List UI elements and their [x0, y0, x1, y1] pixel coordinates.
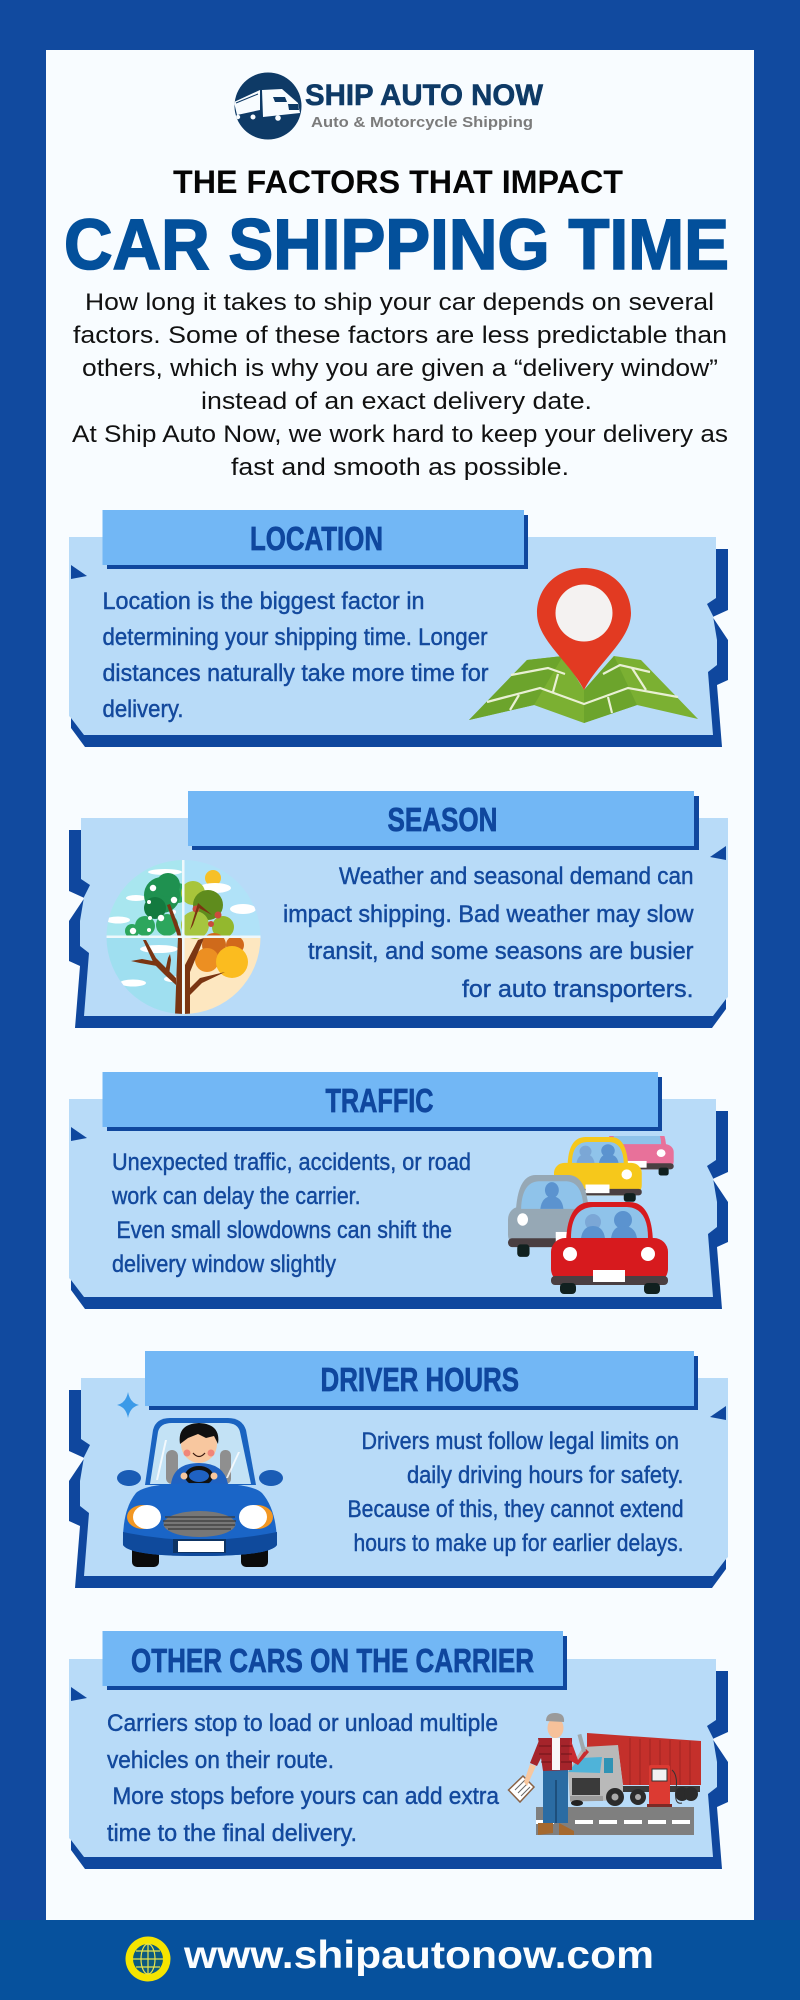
- text: season: for auto transporters.: [462, 976, 694, 1003]
- text: location: delivery.: [102, 696, 184, 723]
- logo name: SHIP AUTO NOW: [305, 79, 544, 112]
- footer bar: [0, 1920, 800, 2000]
- text: traffic: delivery window slightly: [112, 1251, 336, 1278]
- text: location: Location is the biggest factor in: [102, 588, 424, 615]
- icon: sparkle: [117, 1392, 139, 1418]
- icon: driver in blue car: [117, 1418, 283, 1567]
- text: other cars: [107, 1710, 500, 1847]
- intro text: factors. Some of these factors are less predictable than: [73, 322, 727, 349]
- heading tab: location: LOCATION: [250, 520, 383, 557]
- panel background: traffic: [69, 1099, 728, 1309]
- logo tagline: Auto & Motorcycle Shipping: [311, 115, 533, 131]
- heading tab: location: [102, 510, 528, 569]
- icon: cars in traffic: [508, 1124, 674, 1294]
- text: location: distances naturally take more time for: [102, 660, 488, 687]
- icon: map pin on green map: [469, 568, 698, 723]
- title line 1: THE FACTORS THAT IMPACT: [173, 164, 623, 200]
- text: season: Weather and seasonal demand can: [339, 863, 694, 890]
- panel background: location: [69, 537, 728, 747]
- panel: driver hours: [69, 1351, 728, 1588]
- intro text: instead of an exact delivery date.: [201, 388, 592, 415]
- heading tab: season: [188, 791, 699, 850]
- text: season: [283, 863, 694, 1003]
- heading tab: driver hours: DRIVER HOURS: [320, 1361, 519, 1398]
- text: traffic: work can delay the carrier.: [111, 1183, 360, 1210]
- text: driver hours: Drivers must follow legal limits on: [362, 1428, 679, 1455]
- title line 2: CAR SHIPPING TIME: [64, 206, 729, 285]
- heading tab: traffic: TRAFFIC: [326, 1082, 434, 1119]
- panel background: season: [69, 818, 728, 1028]
- text: traffic: Unexpected traffic, accidents, or road: [112, 1149, 471, 1176]
- logo icon: truck in circle: [234, 72, 302, 140]
- text: driver hours: [348, 1428, 684, 1557]
- heading tab: traffic: [102, 1072, 662, 1131]
- heading tab: other cars: OTHER CARS ON THE CARRIER: [131, 1642, 534, 1679]
- text: driver hours: hours to make up for earlier delays.: [354, 1530, 684, 1557]
- icon: trucker, truck and fuel pump: [508, 1713, 701, 1835]
- text: driver hours: Because of this, they cannot extend: [348, 1496, 684, 1523]
- intro text: fast and smooth as possible.: [231, 454, 569, 481]
- text: traffic: Even small slowdowns can shift the: [116, 1217, 452, 1244]
- text: traffic: [111, 1149, 471, 1278]
- text: other cars: vehicles on their route.: [107, 1747, 334, 1774]
- intro text: others, which is why you are given a “delivery window”: [82, 355, 718, 382]
- car: gray: [508, 1175, 588, 1257]
- intro text: [72, 289, 728, 481]
- car: red: [551, 1202, 668, 1294]
- text: driver hours: daily driving hours for safety.: [407, 1462, 684, 1489]
- text: location: [102, 588, 488, 723]
- heading tab: driver hours: [145, 1351, 698, 1410]
- text: season: impact shipping. Bad weather may slow: [283, 901, 694, 928]
- panel: other cars on the carrier: [69, 1631, 728, 1869]
- text: other cars: Carriers stop to load or unload multiple: [107, 1710, 498, 1737]
- icon: yellow globe: [126, 1936, 170, 1982]
- text: other cars: time to the final delivery.: [107, 1820, 357, 1847]
- panel: traffic: [69, 1072, 728, 1309]
- icon: four seasons tree: [106, 860, 260, 1014]
- intro text: At Ship Auto Now, we work hard to keep your delivery as: [72, 421, 728, 448]
- car: yellow: [554, 1137, 642, 1202]
- panel background: driver hours: [69, 1378, 728, 1588]
- heading tab: season: SEASON: [388, 801, 498, 838]
- text: other cars: More stops before yours can add extra: [112, 1783, 500, 1810]
- text: location: determining your shipping time. Longer: [102, 624, 488, 651]
- text: season: transit, and some seasons are busier: [308, 938, 694, 965]
- footer url: www.shipautonow.com: [183, 1934, 654, 1977]
- panel: season: [69, 791, 728, 1028]
- heading tab: other cars: [102, 1631, 567, 1690]
- logo: Ship Auto Now: [234, 72, 544, 140]
- intro text: How long it takes to ship your car depends on several: [85, 289, 714, 316]
- car: pink: [609, 1136, 674, 1176]
- panel: location: [69, 510, 728, 747]
- panel background: other cars: [69, 1659, 728, 1869]
